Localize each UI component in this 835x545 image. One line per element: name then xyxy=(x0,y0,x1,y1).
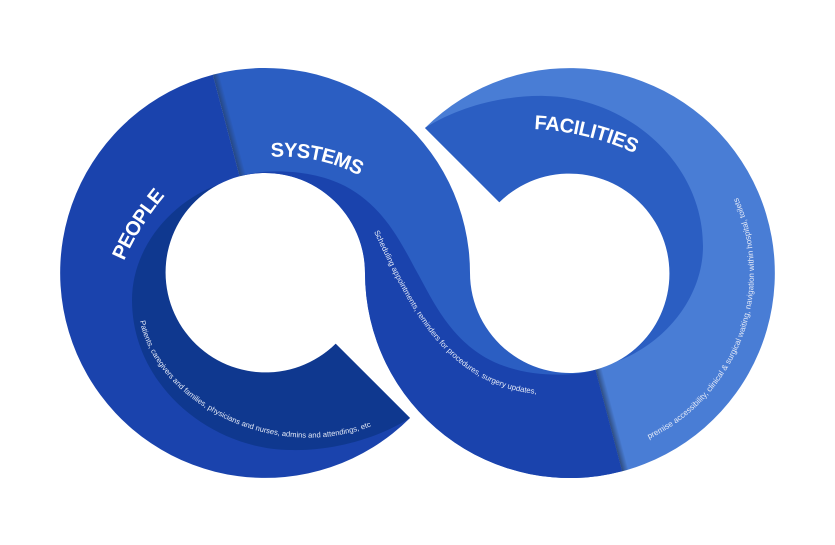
panel: people xyxy=(60,74,410,478)
heading: systems: SYSTEMS xyxy=(271,142,364,174)
people outer band xyxy=(60,75,410,478)
text: facilities description: premise accessibility, clinical & surgical waiting, navigation within hospital, toilets xyxy=(648,198,754,440)
fold shadow: people to systems xyxy=(213,73,246,176)
text: systems description: Scheduling appointments, reminders for procedures, surgery updates, xyxy=(374,230,536,395)
systems upper band xyxy=(213,68,622,478)
text: people description: Patients, caregivers and families, physicians and nurses, admins and attendings, etc xyxy=(140,320,371,438)
fold shadow: systems to facilities xyxy=(595,368,628,471)
people inner crescent xyxy=(132,185,410,450)
facilities inner crescent xyxy=(425,96,703,361)
systems lower band xyxy=(240,171,622,478)
facilities outer band xyxy=(425,68,775,471)
panel: systems xyxy=(212,68,622,478)
heading: people: PEOPLE xyxy=(112,188,164,260)
heading: facilities: FACILITIES xyxy=(535,115,638,152)
panel: facilities xyxy=(425,68,775,472)
